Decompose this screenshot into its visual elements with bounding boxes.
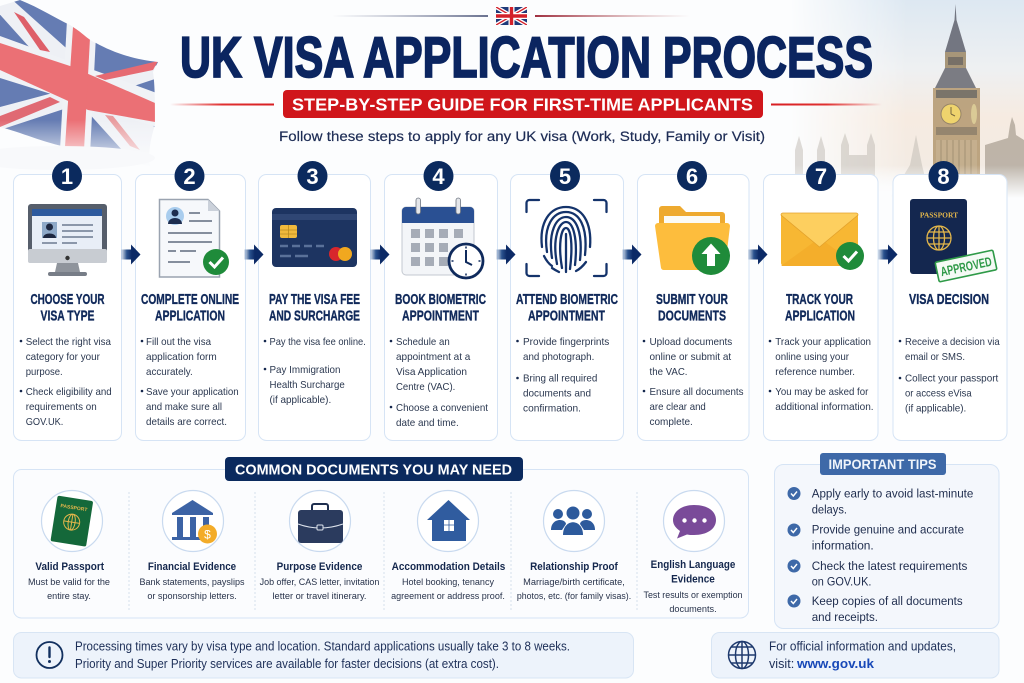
intro line: Follow these steps to apply for any UK visa (Work, Study, Family or Visit): [279, 129, 765, 145]
document: english language evidence: English Language: [651, 559, 735, 571]
number badge 4: 4: [432, 164, 445, 189]
step 5 heading: ATTEND BIOMETRIC: [516, 292, 618, 308]
step 4 text: Visa Application: [396, 367, 467, 378]
document: accommodation details: [391, 490, 505, 602]
document: english language evidence: [644, 490, 742, 615]
arrow 4 to 5: [496, 244, 516, 264]
step 4 text: [390, 337, 488, 429]
step 7 heading: APPLICATION: [785, 308, 855, 324]
number badge 5: 5: [559, 164, 571, 189]
step 4 heading: [395, 292, 486, 324]
document: financial evidence: Financial Evidence: [148, 561, 236, 573]
document: purpose evidence: Job offer, CAS letter, invitation: [260, 577, 379, 588]
arrow 3 to 4: [370, 244, 390, 264]
number badge 3: [298, 161, 328, 191]
tip 3: Check the latest requirements: [812, 559, 967, 573]
icon: globe: [728, 642, 756, 668]
tip 4: [788, 594, 963, 624]
heading: common documents: [225, 457, 523, 481]
subtitle banner: STEP-BY-STEP GUIDE FOR FIRST-TIME APPLICANTS: [292, 94, 753, 114]
step 5 text: [516, 337, 609, 414]
icon: calendar and clock: [402, 198, 483, 278]
icon: exclamation: [36, 642, 62, 668]
icon: computer monitor: [28, 204, 107, 276]
step 1 heading: CHOOSE YOUR: [30, 292, 105, 308]
document: purpose evidence: letter or travel itinerary.: [272, 591, 366, 602]
tip 4: and receipts.: [812, 610, 878, 624]
arrow 1 to 2: [121, 244, 140, 264]
step 5 text: confirmation.: [523, 404, 581, 414]
step 1 text: [20, 337, 112, 428]
step 2 text: accurately.: [146, 367, 193, 378]
document: relationship proof: [517, 490, 631, 602]
step 1 text: requirements on: [26, 402, 97, 413]
step 6 text: complete.: [650, 417, 693, 428]
step 5 text: Bring all required: [523, 374, 598, 384]
step 7 text: Track your application: [775, 337, 871, 348]
official info text: visit:: [769, 657, 794, 671]
arrow 7 to 8: [878, 244, 898, 264]
step 1 text: category for your: [26, 352, 101, 363]
heading: important tips: [820, 453, 946, 475]
step 7 text: [769, 337, 874, 413]
heading: important tips: IMPORTANT TIPS: [828, 456, 936, 472]
official info text: For official information and updates,: [769, 640, 956, 654]
document: valid passport: PASSPORT: [60, 503, 88, 513]
step 7: [764, 161, 878, 440]
step 5 text: and photograph.: [523, 352, 594, 363]
icon: folder with upload: [655, 206, 730, 275]
document: accommodation details: Hotel booking, tenancy: [402, 577, 494, 588]
document: english language evidence: Evidence: [671, 574, 715, 586]
step 8 text: [899, 337, 1000, 414]
step 5 heading: APPOINTMENT: [528, 308, 605, 324]
icon: fingerprint scan: [526, 200, 606, 276]
step 4 heading: BOOK BIOMETRIC: [395, 292, 486, 308]
icon: passport approved: [910, 199, 997, 282]
tip 2: [788, 522, 964, 552]
step 6 heading: SUBMIT YOUR: [656, 292, 728, 308]
step 2 heading: [141, 292, 239, 324]
step 6 text: online or submit at: [650, 352, 731, 363]
step 2 text: [141, 337, 239, 428]
step 1: [14, 161, 122, 440]
step 6 heading: DOCUMENTS: [658, 308, 726, 324]
step 1 text: GOV.UK.: [26, 417, 63, 428]
step 2 text: Save your application: [146, 387, 239, 398]
step 4 text: Choose a convenient: [396, 403, 488, 414]
step 6 heading: [656, 292, 728, 324]
tip 2: information.: [812, 538, 874, 552]
document: financial evidence: or sponsorship letters.: [147, 591, 237, 602]
number badge 6: 6: [686, 164, 698, 189]
subtitle banner: [283, 90, 763, 118]
number badge 2: 2: [183, 164, 196, 189]
step 6: [638, 161, 749, 440]
step 3 text: Health Surcharge: [270, 380, 345, 391]
document: valid passport: Valid Passport: [35, 561, 104, 573]
icon: payment card: [272, 208, 357, 267]
step 8: [893, 161, 1007, 440]
step 5 text: documents and: [523, 388, 591, 400]
callout: official information: [712, 632, 999, 678]
arrow 5 to 6: [622, 244, 642, 264]
step 1 text: purpose.: [26, 367, 63, 378]
document: purpose evidence: Purpose Evidence: [277, 561, 362, 573]
image: waving UK flag: [0, 0, 158, 150]
tip 3: [788, 559, 967, 588]
icon: application document: [160, 200, 229, 277]
step 8 text: or access eVisa: [905, 388, 972, 400]
step 4 text: Schedule an: [396, 337, 450, 348]
step 3 text: Pay the visa fee online.: [270, 337, 366, 348]
document: valid passport: [28, 490, 110, 602]
decorative rules and small flag: [170, 7, 882, 106]
number badge 1: [52, 161, 82, 191]
document: relationship proof: Marriage/birth certificate,: [523, 577, 625, 588]
document: financial evidence: [140, 490, 245, 602]
step 1 text: Select the right visa: [26, 337, 111, 348]
step 7 text: additional information.: [775, 402, 874, 413]
document: accommodation details: Accommodation Details: [392, 561, 505, 573]
image: Big Ben and Westminster skyline: [790, 0, 1024, 198]
number badge 6: [677, 161, 707, 191]
step 6 text: are clear and: [650, 402, 706, 413]
step 2 heading: APPLICATION: [155, 308, 225, 324]
step 4 heading: APPOINTMENT: [402, 308, 479, 324]
document: accommodation details: agreement or address proof.: [391, 591, 505, 602]
step 3 text: (if applicable).: [270, 395, 331, 406]
number badge 2: [174, 161, 204, 191]
document: valid passport: entire stay.: [47, 591, 91, 602]
step 8 text: (if applicable).: [905, 404, 966, 414]
processing text: Priority and Super Priority services are available for faster decisions (at extra cost).: [75, 657, 499, 671]
number badge 8: 8: [937, 164, 950, 189]
step 3 heading: AND SURCHARGE: [269, 308, 360, 324]
panel: common documents: [14, 457, 748, 618]
step 3 text: [264, 337, 366, 406]
document: financial evidence: $: [204, 528, 211, 542]
tip 3: on GOV.UK.: [812, 574, 871, 588]
icon: envelope with check: [781, 213, 864, 270]
document: valid passport: Must be valid for the: [28, 577, 110, 588]
step 5 text: Provide fingerprints: [523, 337, 609, 348]
number badge 3: 3: [306, 164, 319, 189]
step 7 text: online using your: [775, 352, 850, 363]
tip 2: Provide genuine and accurate: [812, 522, 964, 536]
step 8 heading: VISA DECISION: [909, 292, 989, 308]
tip 1: Apply early to avoid last-minute: [812, 486, 974, 500]
tip 1: delays.: [812, 502, 847, 516]
step 1 heading: VISA TYPE: [40, 308, 95, 324]
step 7 heading: TRACK YOUR: [786, 292, 853, 308]
step 3 heading: PAY THE VISA FEE: [269, 292, 360, 308]
step 4 text: appointment at a: [396, 352, 471, 363]
document: financial evidence: Bank statements, payslips: [140, 577, 245, 588]
step 3 heading: [269, 292, 360, 324]
step 2 heading: COMPLETE ONLINE: [141, 292, 239, 308]
step 6 text: Upload documents: [650, 337, 732, 348]
step 3: [258, 161, 370, 440]
step 6 text: the VAC.: [650, 367, 688, 378]
step 3 text: Pay Immigration: [270, 365, 340, 376]
number badge 1: 1: [61, 164, 73, 189]
step 4 text: Centre (VAC).: [396, 382, 455, 393]
processing text: [75, 640, 570, 671]
document: english language evidence: Test results or exemption: [644, 590, 742, 601]
step 5 heading: [516, 292, 618, 324]
number badge 7: 7: [815, 164, 827, 189]
step 1 text: Check eligibility and: [26, 387, 112, 398]
step 8 text: Receive a decision via: [905, 337, 1000, 348]
step 2 text: Fill out the visa: [146, 337, 211, 348]
number badge 4: [424, 161, 454, 191]
step 8 text: email or SMS.: [905, 352, 965, 363]
step 5: [510, 161, 624, 440]
number badge 7: [806, 161, 836, 191]
official info text: www.gov.uk: [796, 656, 875, 671]
step 4: [384, 161, 498, 440]
document: purpose evidence: [260, 490, 379, 602]
arrow 2 to 3: [244, 244, 264, 264]
step 6 text: [643, 337, 744, 428]
document: relationship proof: photos, etc. (for family visas).: [517, 591, 631, 602]
callout: processing times: [14, 632, 634, 678]
step 4 text: date and time.: [396, 418, 459, 429]
step 2 text: details are correct.: [146, 417, 227, 428]
official info text: [769, 640, 956, 671]
step 8 text: Collect your passport: [905, 374, 998, 384]
step 1 heading: [30, 292, 105, 324]
step 2: [136, 161, 246, 440]
step 7 text: reference number.: [775, 367, 855, 378]
number badge 8: [928, 161, 958, 191]
step 2 text: application form: [146, 352, 217, 363]
heading: common documents: COMMON DOCUMENTS YOU MAY NEED: [235, 462, 512, 478]
icon: passport approved: PASSPORT: [920, 210, 958, 220]
tip 1: [788, 486, 974, 516]
document: english language evidence: documents.: [669, 604, 717, 615]
step 7 text: You may be asked for: [775, 387, 869, 398]
number badge 5: [550, 161, 580, 191]
icon: passport approved: APPROVED: [939, 254, 993, 279]
document: relationship proof: Relationship Proof: [530, 561, 618, 573]
arrow 6 to 7: [748, 244, 768, 264]
processing text: Processing times vary by visa type and location. Standard applications usually take 3 to 8 weeks.: [75, 640, 570, 654]
panel: important tips: [774, 453, 999, 628]
step 2 text: and make sure all: [146, 402, 222, 413]
step 7 heading: [785, 292, 855, 324]
step 6 text: Ensure all documents: [650, 387, 744, 398]
tip 4: Keep copies of all documents: [812, 594, 963, 608]
